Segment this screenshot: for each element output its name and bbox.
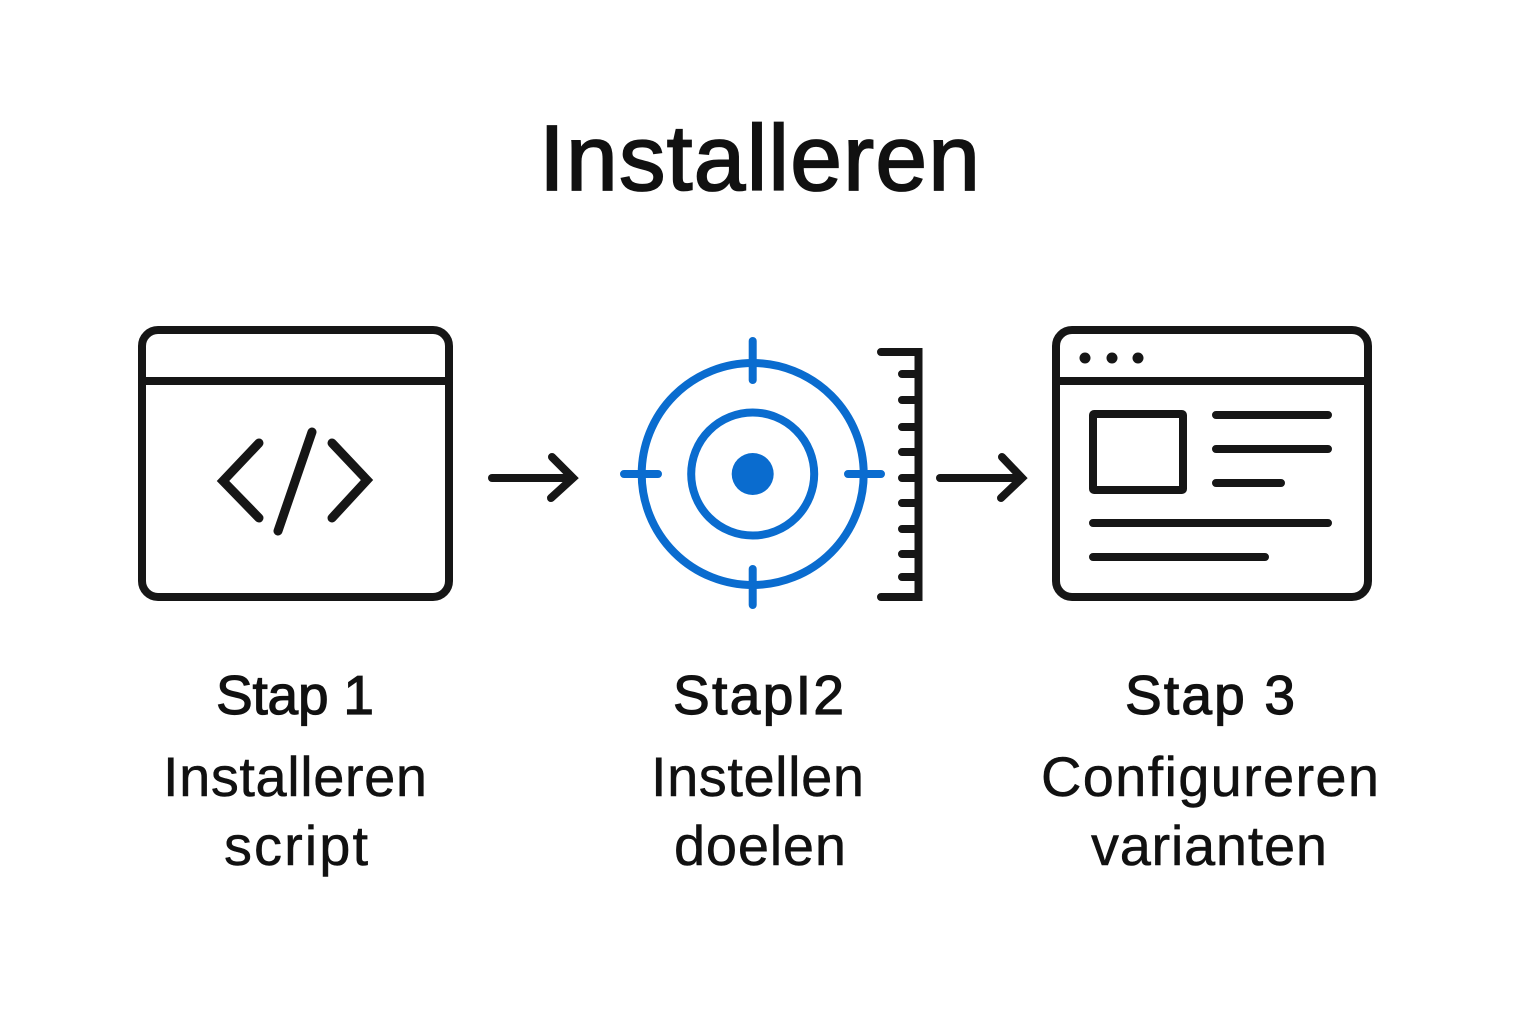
title: Installeren xyxy=(539,106,980,210)
step 1 description: script xyxy=(224,814,368,877)
step 3 heading: Stap 3 xyxy=(1125,664,1295,726)
icon: browser layout window xyxy=(1056,330,1368,597)
step 2 heading: StapI2 xyxy=(673,664,844,726)
panel: step 3 xyxy=(1041,330,1379,877)
step 3 description: Configureren xyxy=(1041,745,1379,808)
arrow: step 1 to step 2 xyxy=(492,457,573,498)
step 2 description: doelen xyxy=(674,814,846,877)
icon: target xyxy=(624,341,881,605)
step 1 description: Installeren xyxy=(163,745,427,808)
step 3 description: varianten xyxy=(1091,814,1327,877)
panel: step 2 xyxy=(624,341,918,877)
step 3 description xyxy=(1041,745,1379,877)
icon: ruler xyxy=(881,352,918,597)
panel: step 1 xyxy=(142,330,449,877)
icon: code window xyxy=(142,330,449,597)
step 1 heading: Stap 1 xyxy=(216,664,374,726)
arrow: step 2 to step 3 xyxy=(940,457,1022,498)
step 2 description xyxy=(651,745,864,877)
step 1 description xyxy=(163,745,427,877)
step 2 description: Instellen xyxy=(651,745,864,808)
